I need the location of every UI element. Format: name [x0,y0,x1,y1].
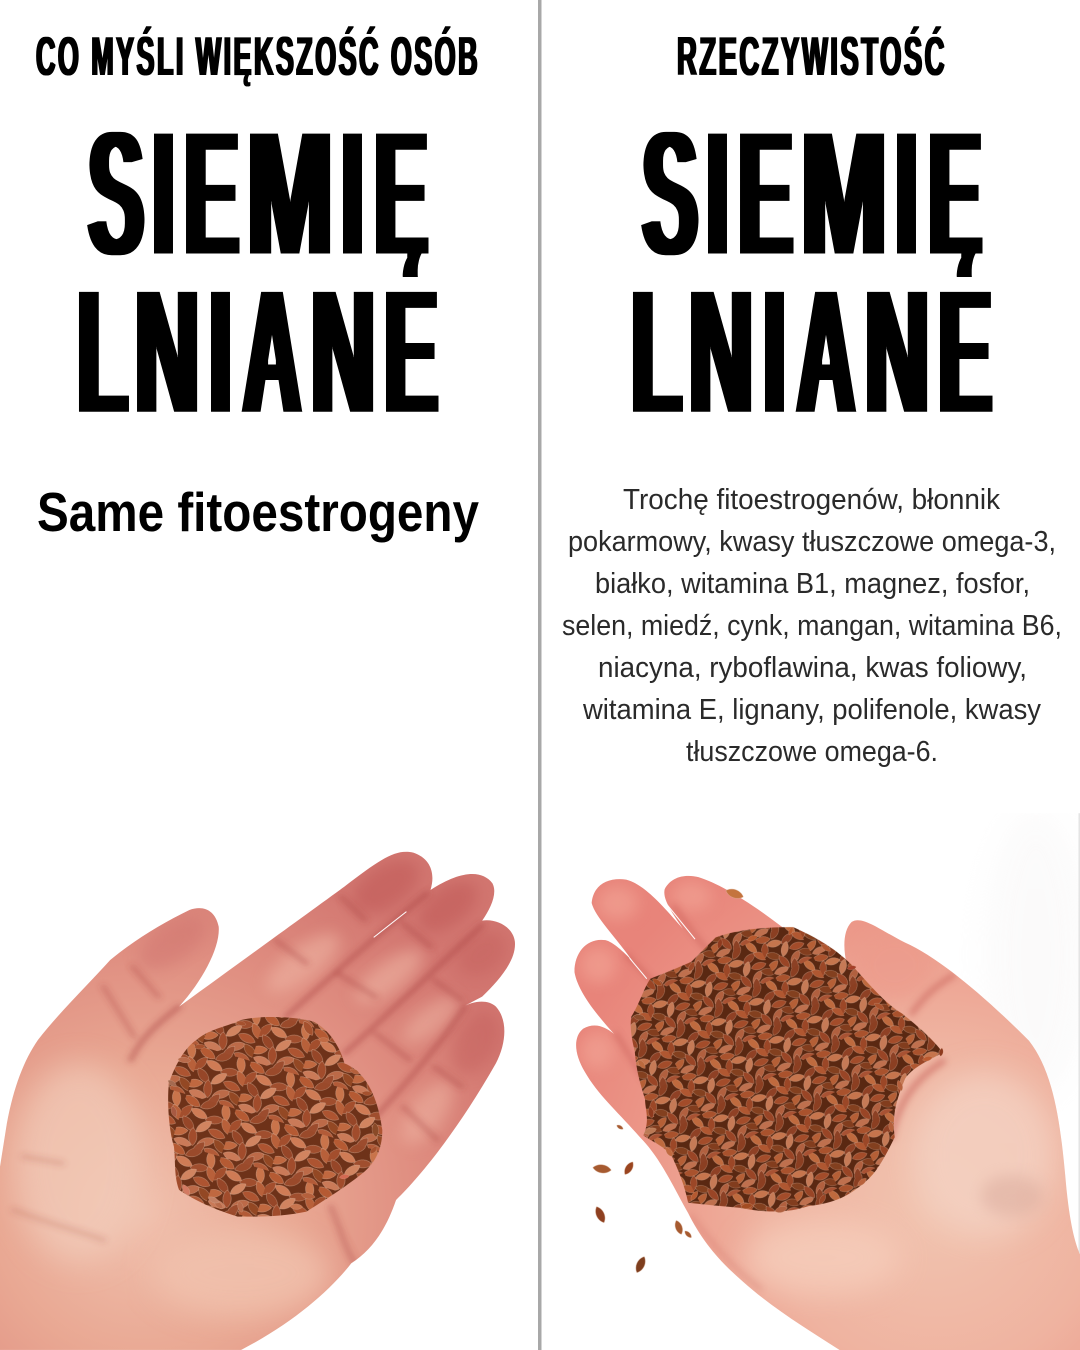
text: only phytoestrogens: Same fitoestrogeny [37,481,479,543]
title: flaxseed: S [642,94,698,294]
title: flaxseed: E [739,94,793,294]
title: flaxseed: S [88,94,144,294]
title: flaxseed: Ę [929,94,982,294]
text: list of nutrients: tłuszczowe omega-6. [686,736,938,768]
title: flaxseed: I [153,94,174,294]
divider [538,0,542,1350]
title: flaxseed: N [689,252,753,453]
text: list of nutrients: pokarmowy, kwasy tłuszczowe omega-3, [568,526,1056,558]
finger gap highlight [374,912,406,937]
text: list of nutrients: Trochę fitoestrogenów, błonnik [623,484,1000,516]
illustration: hand with a small pile of flaxseed [0,830,540,1350]
title: flaxseed: L [632,252,682,453]
title: flaxseed: Ę [375,94,428,294]
photo background [1078,813,1080,1254]
title: flaxseed: I [707,94,728,294]
text: list of nutrients [562,484,1062,768]
hand [574,876,1080,1350]
title: flaxseed [632,132,992,412]
finger gap highlight [630,903,695,979]
illustration: hand with a large pile of flaxseed [540,810,1080,1350]
title: flaxseed: I [342,94,363,294]
title: flaxseed: M [247,94,333,294]
panel: reality (right) [540,25,1080,1350]
text: list of nutrients: niacyna, ryboflawina, kwas foliowy, [598,652,1027,684]
title: flaxseed: I [210,252,231,453]
text: list of nutrients: witamina E, lignany, polifenole, kwasy [582,694,1041,726]
title: flaxseed: N [865,252,929,453]
title: flaxseed: A [797,252,855,453]
title: flaxseed: I [896,94,917,294]
hand [0,830,540,1350]
title: flaxseed: M [801,94,887,294]
panel: common belief (left): E [385,252,438,453]
title: flaxseed: I [764,252,785,453]
seeds pile [167,1017,382,1217]
title: flaxseed: A [243,252,301,453]
title: flaxseed: N [135,252,199,453]
title: flaxseed: N [311,252,375,453]
title: flaxseed: E [185,94,239,294]
panel: reality (right): E [939,252,992,453]
panel: common belief (left) [0,25,540,1350]
title: flaxseed [78,132,438,412]
text: list of nutrients: białko, witamina B1, magnez, fosfor, [595,568,1030,600]
panel: common belief (left): CO MYŚLI WIĘKSZOŚĆ OSÓB [36,25,480,87]
seeds pile [631,927,944,1214]
loose seeds [592,887,745,1274]
title: flaxseed: L [78,252,128,453]
